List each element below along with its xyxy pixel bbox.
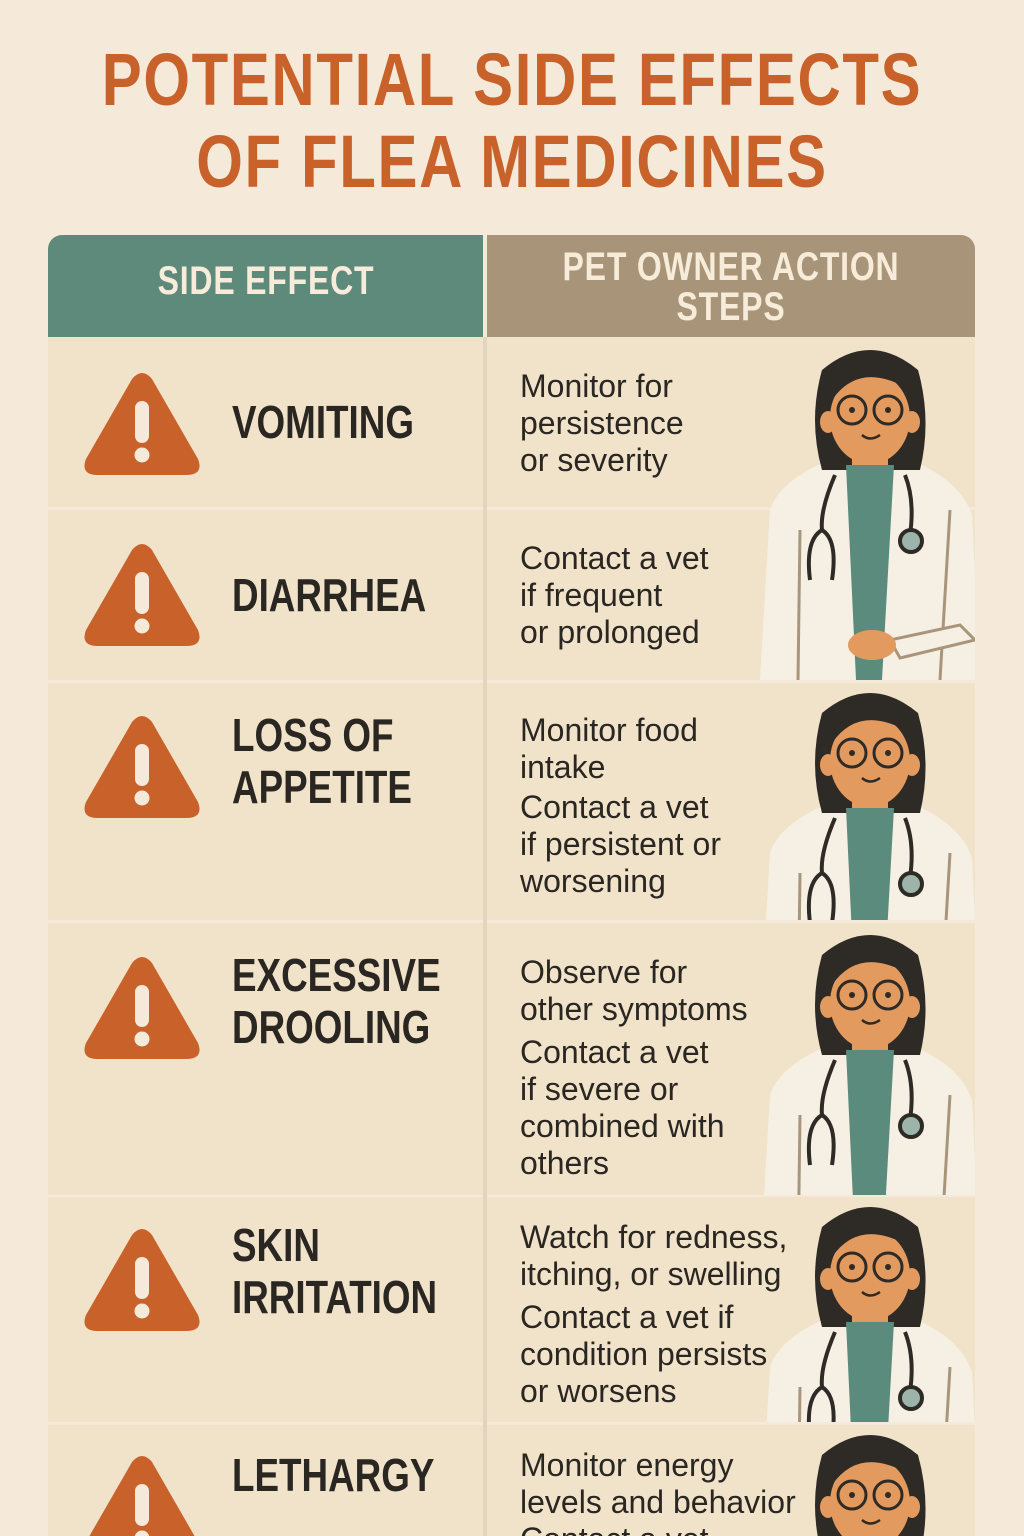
doctor 4: [766, 1207, 974, 1422]
row: vomiting: [48, 337, 975, 507]
action: skin: or worsens: [520, 1373, 676, 1409]
action: vomiting: Monitor for: [520, 368, 673, 404]
label: skin irritation: IRRITATION: [232, 1271, 437, 1323]
action: diarrhea: or prolonged: [520, 614, 700, 650]
action: appetite: worsening: [520, 863, 666, 899]
label: lethargy: LETHARGY: [232, 1449, 434, 1501]
header: action steps: [487, 235, 975, 337]
row: lethargy: [48, 1425, 975, 1536]
icon: warning 4: [84, 957, 200, 1059]
action: appetite: Contact a vet: [520, 789, 709, 825]
row: diarrhea: [48, 510, 975, 680]
action: lethargy: [520, 1447, 796, 1536]
row: skin: [48, 1197, 975, 1422]
label: excessive drooling: EXCESSIVE: [232, 949, 441, 1001]
action: lethargy: levels and behavior: [520, 1484, 796, 1520]
title: [102, 38, 922, 203]
title: POTENTIAL SIDE EFFECTS: [102, 38, 922, 121]
action: drooling: combined with: [520, 1108, 725, 1144]
icon: warning 2: [84, 544, 200, 646]
action: drooling: Observe for: [520, 954, 687, 990]
doctor 1: [760, 350, 975, 680]
label: vomiting: VOMITING: [232, 396, 414, 448]
action: drooling: Contact a vet: [520, 1034, 709, 1070]
label: excessive drooling: [232, 949, 441, 1053]
doctor 2: [766, 693, 975, 920]
label: skin irritation: [232, 1219, 437, 1323]
action: skin: condition persists: [520, 1336, 767, 1372]
icon: warning 3: [84, 716, 200, 818]
header: side effect: SIDE EFFECT: [157, 259, 374, 303]
action: appetite: Monitor food: [520, 712, 698, 748]
action: drooling: [520, 954, 748, 1181]
action: drooling: if severe or: [520, 1071, 678, 1107]
doctor 3: [764, 935, 975, 1195]
action: diarrhea: [520, 540, 709, 650]
icon: warning 6: [90, 1456, 194, 1536]
action: appetite: if persistent or: [520, 826, 721, 862]
header: action steps: STEPS: [677, 285, 785, 329]
action: drooling: other symptoms: [520, 991, 748, 1027]
row: loss of appetite: [48, 683, 975, 920]
action: diarrhea: Contact a vet: [520, 540, 709, 576]
icon: warning 1: [84, 373, 200, 475]
row: drooling: [48, 923, 975, 1195]
header: side effect: [48, 235, 483, 337]
action: skin: itching, or swelling: [520, 1256, 781, 1292]
action: lethargy: Monitor energy: [520, 1447, 733, 1483]
action: drooling: others: [520, 1145, 609, 1181]
label: excessive drooling: DROOLING: [232, 1001, 430, 1053]
action: vomiting: or severity: [520, 442, 668, 478]
label: skin irritation: SKIN: [232, 1219, 320, 1271]
action: vomiting: persistence: [520, 405, 684, 441]
action: diarrhea: if frequent: [520, 577, 662, 613]
action: skin: Contact a vet if: [520, 1299, 733, 1335]
action: appetite: [520, 712, 721, 899]
doctor 5: [815, 1435, 926, 1536]
label: loss of appetite: APPETITE: [232, 761, 412, 813]
label: loss of appetite: [232, 709, 412, 813]
title: OF FLEA MEDICINES: [196, 120, 828, 203]
icon: warning 5: [84, 1229, 200, 1331]
label: diarrhea: DIARRHEA: [232, 569, 426, 621]
header: action steps: PET OWNER ACTION: [563, 245, 899, 289]
column divider: [483, 337, 487, 1536]
action: skin: [520, 1219, 787, 1409]
action: appetite: intake: [520, 749, 605, 785]
action: vomiting: [520, 368, 684, 478]
action: skin: Watch for redness,: [520, 1219, 787, 1255]
label: loss of appetite: LOSS OF: [232, 709, 394, 761]
